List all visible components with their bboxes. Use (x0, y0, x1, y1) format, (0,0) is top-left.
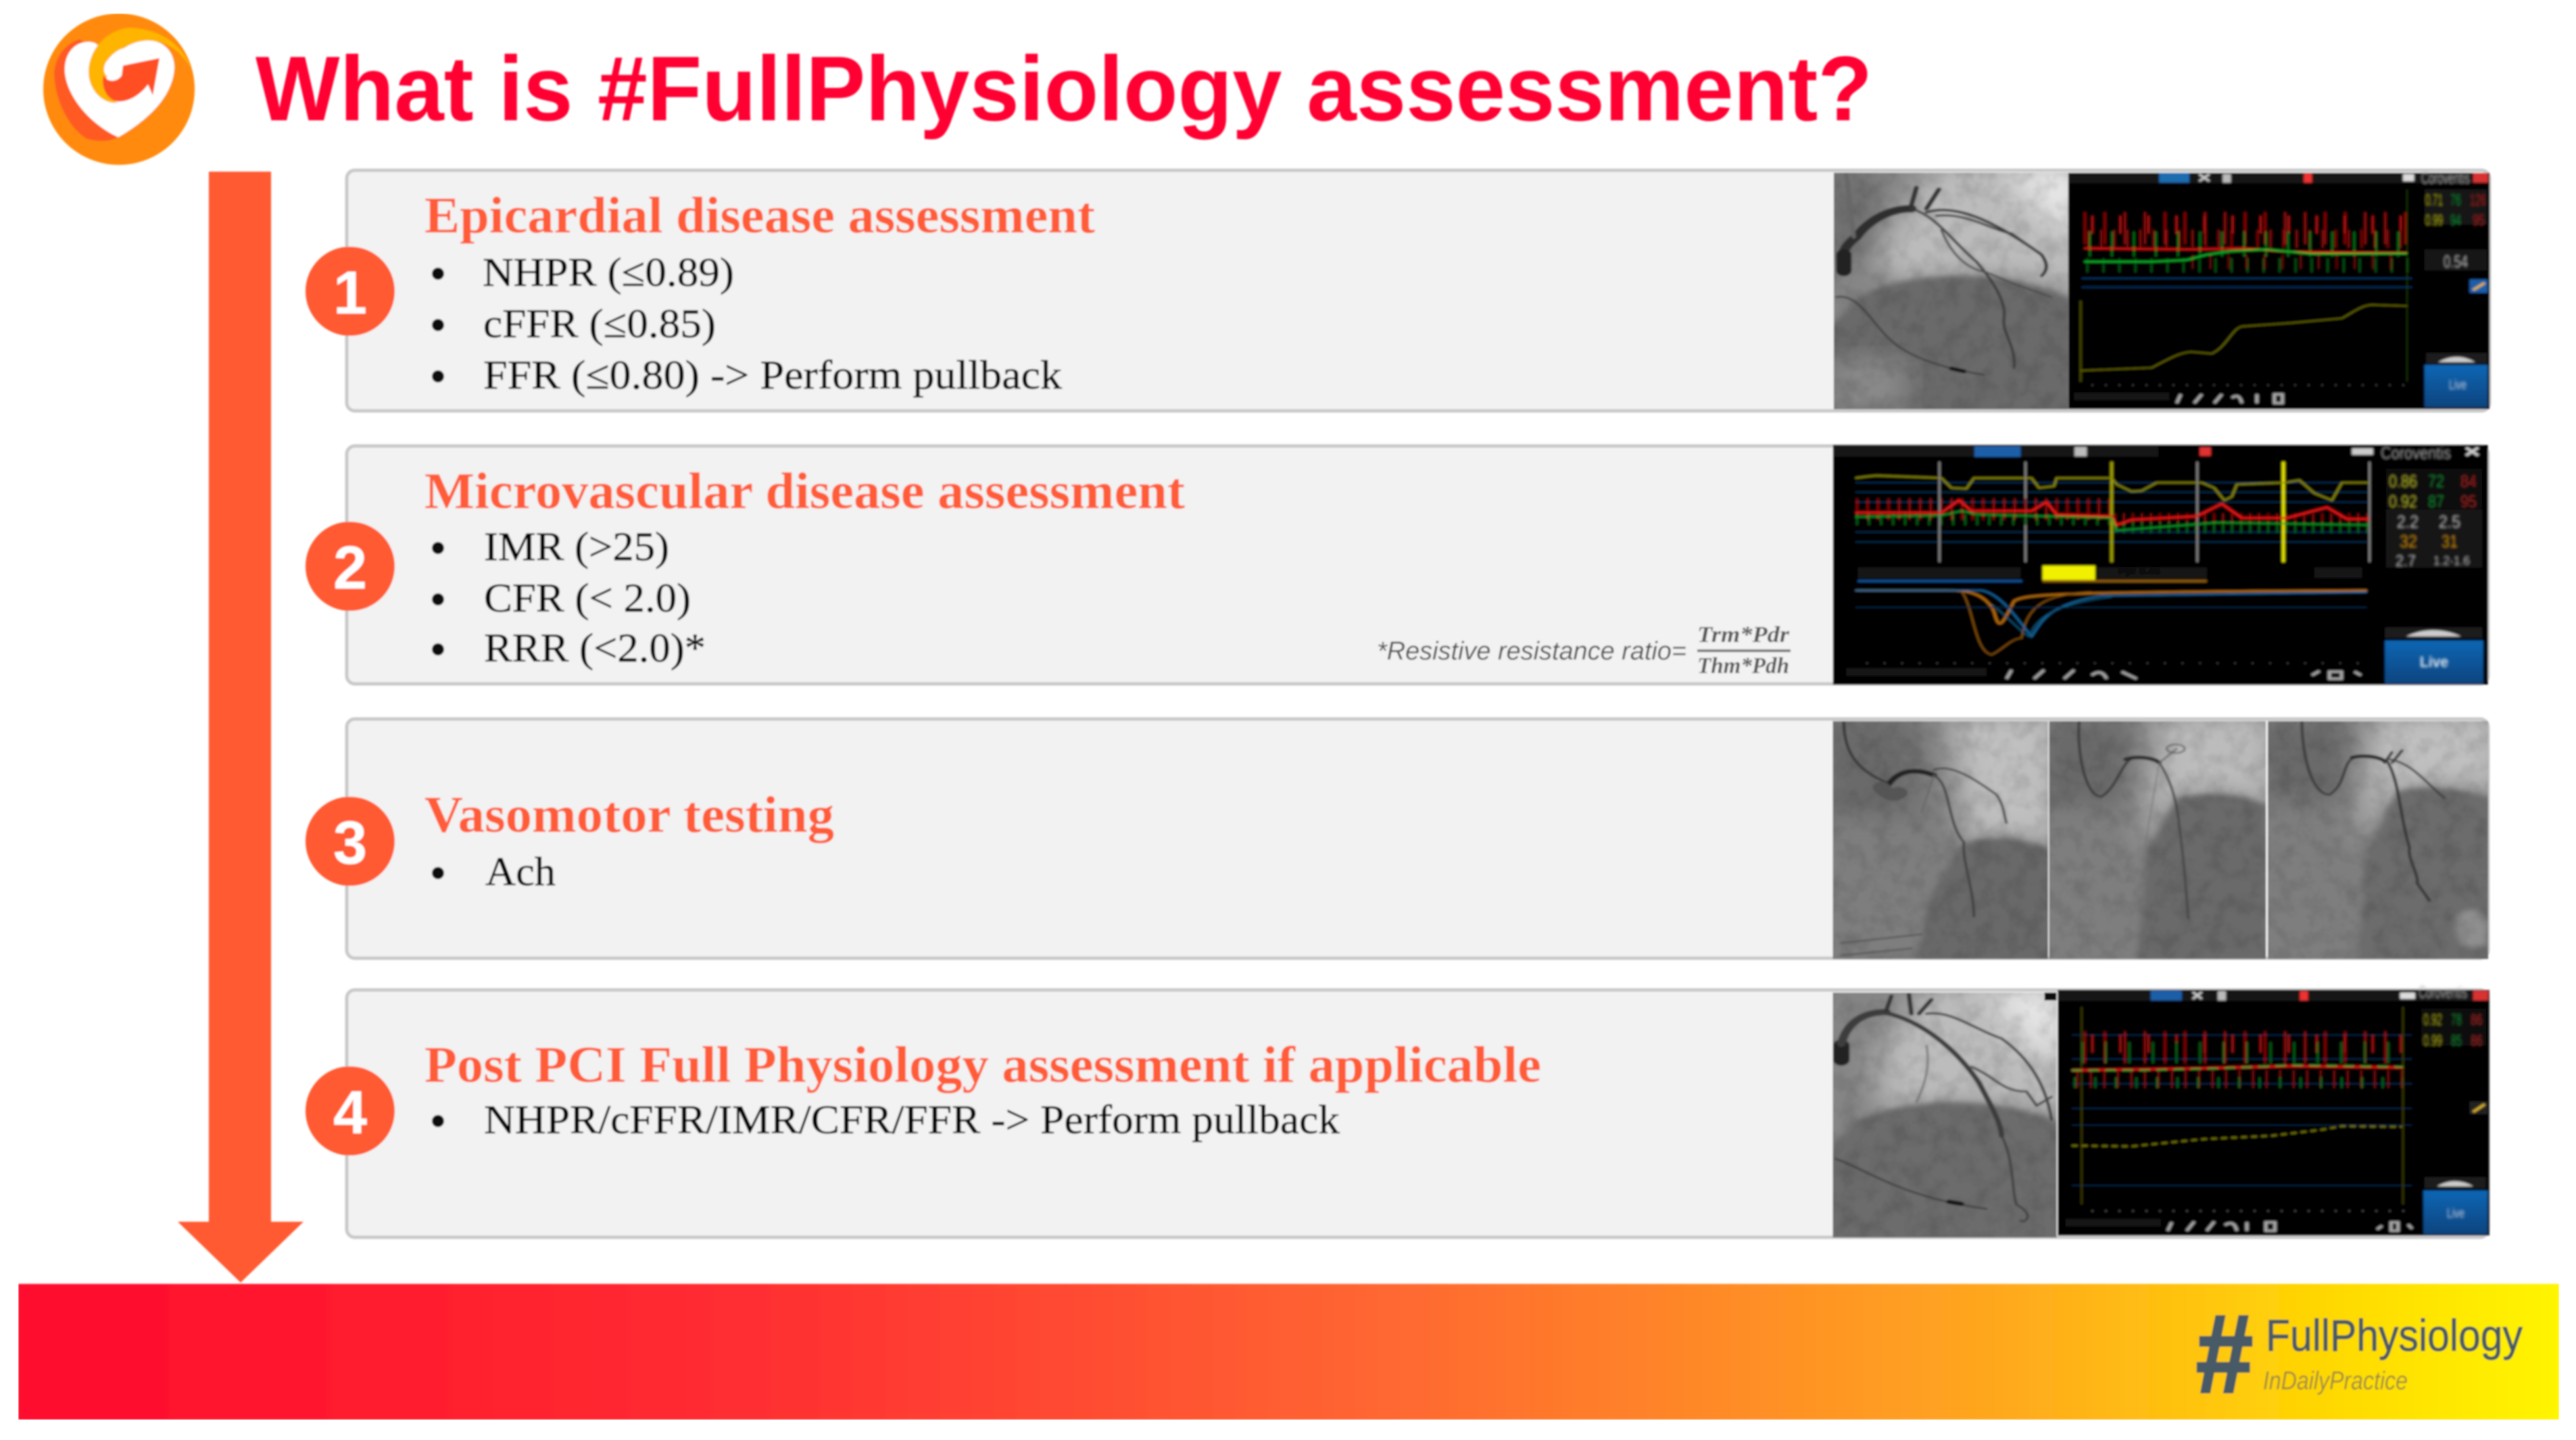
step number 1: 1 (333, 259, 367, 327)
monitor readouts: 76 (2450, 191, 2461, 209)
image: angiogram B, panel 3 (2048, 720, 2267, 960)
step number 4 (306, 1066, 395, 1156)
monitor readouts: 32 (2400, 531, 2417, 551)
bullet list 2: CFR (< 2.0) (484, 576, 691, 620)
footer logo: #FullPhysiology InDailyPractice: # (2196, 1292, 2253, 1416)
bullet list 1: NHPR (≤0.89) (483, 250, 734, 295)
monitor readouts: 72 (2428, 471, 2444, 491)
step number 4: 4 (333, 1079, 367, 1147)
monitor readouts: 84 (2460, 471, 2477, 491)
heading 1: Epicardial disease assessment (424, 187, 1095, 244)
step number 2: 2 (333, 535, 367, 602)
monitor readouts: 95 (2473, 212, 2485, 230)
logo (43, 14, 195, 165)
image: angiogram A, panel 3 (1832, 720, 2049, 960)
monitor readouts (2419, 982, 2483, 1221)
image: angiogram, panel 1 (1832, 172, 2070, 411)
monitor readouts: Coroventis (2419, 982, 2467, 1002)
monitor readouts: 126 (2470, 191, 2486, 209)
footnote: resistive reserve formula: Thm*Pdh (1697, 653, 1789, 678)
monitor readouts: 86 (2471, 1011, 2483, 1029)
monitor readouts: Live (2449, 378, 2466, 393)
monitor readouts: 94 (2450, 212, 2461, 230)
monitor readouts: 0.86 (2389, 471, 2417, 491)
monitor readouts: 2.5 (2439, 512, 2460, 532)
monitor readouts: 85 (2451, 1032, 2462, 1050)
footer logo: #FullPhysiology InDailyPractice: InDailyPractice (2263, 1367, 2408, 1395)
image: pressure monitor, panel 1 (2068, 168, 2489, 409)
monitor readouts: 0.99 (2425, 212, 2443, 230)
panel 1: epicardial disease assessment (306, 170, 2489, 411)
footer logo: #FullPhysiology InDailyPractice (2196, 1292, 2523, 1416)
monitor readouts: 1.2-1.6 (2433, 554, 2470, 568)
bullet list 2 (432, 524, 706, 670)
footnote: resistive reserve formula: Trm*Pdr (1697, 622, 1790, 647)
bullet list 4: NHPR/cFFR/IMR/CFR/FFR -> Perform pullback (484, 1097, 1340, 1142)
arrow: vertical progression (178, 172, 303, 1283)
monitor readouts: 0.92 (2423, 1011, 2442, 1029)
monitor readouts (2421, 168, 2486, 393)
monitor readouts: 2.2 (2397, 512, 2419, 532)
monitor readouts: Live (2447, 1206, 2464, 1221)
monitor readouts: 2.7 (2396, 552, 2416, 570)
monitor readouts: 0.54 (2444, 251, 2468, 272)
monitor readouts: Coroventis (2421, 168, 2470, 188)
bullet list 1: FFR (≤0.80) -> Perform pullback (483, 353, 1062, 397)
monitor readouts: 31 (2441, 531, 2458, 551)
monitor readouts: 95 (2460, 491, 2477, 512)
bullet list 3 (432, 849, 556, 894)
panel 3: vasomotor testing (306, 719, 2488, 958)
step number 1 (306, 247, 395, 336)
image: angiogram, panel 4 (1832, 991, 2058, 1239)
monitor readouts: 0.99 (2423, 1032, 2442, 1050)
image: pressure monitor, panel 2 (1832, 443, 2488, 685)
bullet list 2: IMR (>25) (484, 524, 669, 569)
bullet list 1 (432, 250, 1062, 397)
heading 2: Microvascular disease assessment (424, 463, 1185, 520)
heading 3: Vasomotor testing (424, 787, 834, 843)
panel 4: post PCI assessment (306, 990, 2488, 1237)
monitor readouts: 86 (2471, 1032, 2483, 1050)
footnote: resistive reserve formula: *Resistive resistance ratio= (1377, 637, 1686, 666)
bullet list 3: Ach (485, 849, 556, 894)
monitor readouts: 78 (2451, 1011, 2462, 1029)
bullet list 1: cFFR (≤0.85) (483, 301, 716, 346)
image: pressure monitor, panel 4 (2058, 982, 2489, 1236)
step number 3 (306, 797, 395, 886)
bullet list 2: RRR (<2.0)* (484, 626, 706, 670)
step number 3: 3 (333, 810, 367, 877)
step number 2 (306, 522, 395, 611)
monitor readouts: 87 (2428, 491, 2444, 512)
monitor readouts: Live (2420, 653, 2448, 670)
monitor readouts: Coroventis (2381, 443, 2451, 463)
monitor readouts (2118, 443, 2477, 670)
footnote: resistive reserve formula (1377, 622, 1791, 678)
footer logo: #FullPhysiology InDailyPractice: FullPhysiology (2266, 1310, 2523, 1360)
monitor readouts: 0.71 (2425, 191, 2443, 209)
footer gradient band (18, 1284, 2559, 1420)
heading 4: Post PCI Full Physiology assessment if applicable (424, 1037, 1541, 1093)
monitor readouts: 0.92 (2389, 491, 2417, 512)
title: What is #FullPhysiology assessment? (256, 37, 1872, 140)
panel 2: microvascular disease assessment (306, 446, 2488, 684)
image: angiogram C, panel 3 (2267, 720, 2489, 960)
monitor readouts: Ppr 0.45 (2118, 566, 2160, 577)
